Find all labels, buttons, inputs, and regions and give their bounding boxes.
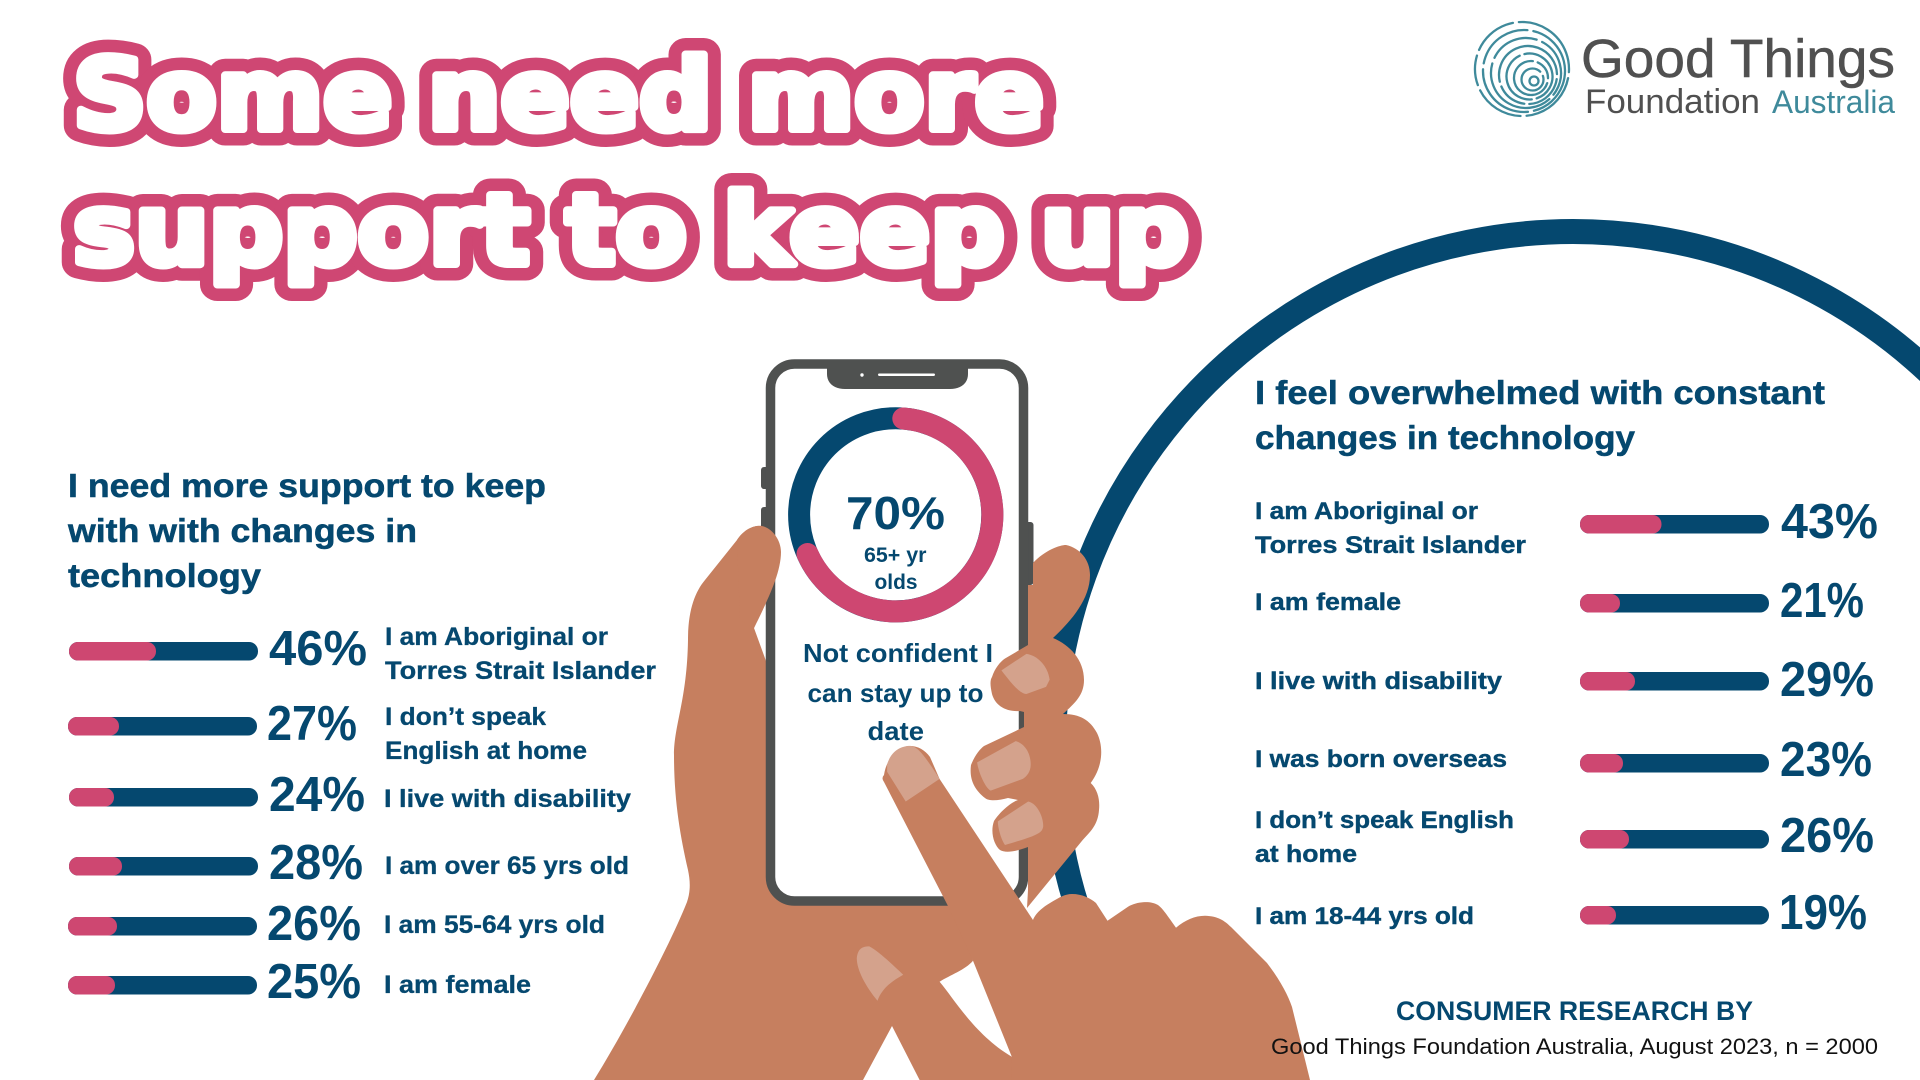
row: female 21%: 21% bbox=[1780, 574, 1864, 628]
row: 55-64 yrs old 26%: I am 55-64 yrs old bbox=[384, 911, 605, 939]
left panel heading: technology bbox=[68, 557, 262, 594]
row: female 25%: 25% bbox=[267, 955, 361, 1009]
title bbox=[73, 39, 1189, 288]
row: born overseas 23%: I was born overseas bbox=[1255, 746, 1507, 773]
title: support to keep up bbox=[73, 174, 1189, 288]
donut label bbox=[846, 487, 945, 594]
title: Some need more bbox=[73, 39, 1044, 153]
row: Aboriginal or Torres Strait Islander 43% bbox=[1255, 495, 1878, 559]
row: live with disability 29%: 29% bbox=[1780, 653, 1874, 707]
row: live with disability 29% bbox=[1255, 653, 1874, 707]
row: over 65 yrs old 28% bbox=[69, 836, 629, 890]
row: 18-44 yrs old 19% bbox=[1255, 886, 1867, 940]
navy circle arc bbox=[1053, 232, 1920, 925]
row: 55-64 yrs old 26%: 26% bbox=[267, 897, 361, 951]
row: born overseas 23% bbox=[1255, 733, 1872, 787]
row: live with disability 24%: I live with disability bbox=[384, 785, 631, 813]
row: 18-44 yrs old 19%: 19% bbox=[1779, 886, 1867, 940]
row: Aboriginal or Torres Strait Islander 46%: I am Aboriginal or bbox=[385, 623, 608, 651]
left panel heading: with with changes in bbox=[67, 512, 417, 549]
donut chart: 70% bbox=[799, 418, 992, 611]
illustration: holding fingers bbox=[971, 545, 1101, 908]
illustration: thumb over phone bbox=[737, 526, 781, 628]
research credit: CONSUMER RESEARCH BY bbox=[1396, 996, 1753, 1026]
row: over 65 yrs old 28%: I am over 65 yrs old bbox=[385, 852, 629, 880]
donut label: 70% bbox=[846, 487, 945, 539]
logo: Good Things Foundation Australia bbox=[1462, 9, 1895, 129]
row: Aboriginal or Torres Strait Islander 46%: 46% bbox=[269, 622, 367, 676]
phone screen caption: can stay up to bbox=[808, 678, 984, 708]
row: Aboriginal or Torres Strait Islander 46%: Torres Strait Islander bbox=[385, 657, 656, 685]
row: over 65 yrs old 28%: 28% bbox=[269, 836, 363, 890]
row: Aboriginal or Torres Strait Islander 43%: 43% bbox=[1781, 495, 1878, 549]
donut label: 65+ yr bbox=[864, 544, 926, 567]
right panel heading bbox=[1255, 374, 1825, 456]
left panel: support bars bbox=[68, 622, 656, 1009]
row: female 21% bbox=[1255, 574, 1864, 628]
row: female 25%: I am female bbox=[384, 971, 531, 999]
illustration: hand behind phone bbox=[594, 526, 1030, 1080]
research credit bbox=[1271, 996, 1878, 1059]
right panel: overwhelmed bars bbox=[1255, 495, 1878, 940]
row: 18-44 yrs old 19%: I am 18-44 yrs old bbox=[1255, 903, 1474, 930]
row: don't speak English at home 26%: 26% bbox=[1780, 809, 1874, 863]
title: Some need more bbox=[73, 39, 1044, 153]
row: live with disability 24% bbox=[69, 768, 631, 822]
row: born overseas 23%: 23% bbox=[1780, 733, 1872, 787]
illustration: pointing hand bbox=[882, 746, 1310, 1080]
row: Aboriginal or Torres Strait Islander 43%: Torres Strait Islander bbox=[1255, 532, 1526, 559]
logo: Good Things Foundation Australia: Foundation bbox=[1585, 83, 1760, 121]
row: don't speak English at home 27%: I don’t speak bbox=[385, 703, 546, 731]
row: don't speak English at home 27%: English at home bbox=[385, 737, 587, 765]
row: live with disability 29%: I live with disability bbox=[1255, 668, 1503, 695]
logo wordmark: Good Things bbox=[1581, 29, 1895, 89]
donut label: olds bbox=[874, 571, 918, 594]
illustration: phone bbox=[761, 364, 1034, 901]
row: don't speak English at home 26%: at home bbox=[1255, 841, 1357, 868]
illustration: fingernails bbox=[857, 654, 1050, 1001]
icon: fingerprint bbox=[1462, 9, 1582, 129]
row: don't speak English at home 26% bbox=[1255, 807, 1874, 868]
row: female 25% bbox=[68, 955, 531, 1009]
row: female 21%: I am female bbox=[1255, 589, 1401, 616]
row: don't speak English at home 27% bbox=[68, 697, 587, 765]
phone screen caption bbox=[803, 638, 993, 746]
research credit: Good Things Foundation Australia, August 2023, n = 2000 bbox=[1271, 1034, 1878, 1059]
row: 55-64 yrs old 26% bbox=[68, 897, 605, 951]
right panel heading: changes in technology bbox=[1255, 419, 1636, 456]
row: Aboriginal or Torres Strait Islander 43%: I am Aboriginal or bbox=[1255, 498, 1478, 525]
left panel heading: I need more support to keep bbox=[68, 467, 546, 504]
title: support to keep up bbox=[73, 174, 1189, 288]
phone screen caption: date bbox=[868, 716, 924, 746]
phone screen caption: Not confident I bbox=[803, 638, 993, 668]
row: live with disability 24%: 24% bbox=[269, 768, 365, 822]
row: don't speak English at home 27%: 27% bbox=[267, 697, 357, 751]
left panel heading bbox=[67, 467, 546, 594]
row: Aboriginal or Torres Strait Islander 46% bbox=[69, 622, 656, 685]
logo: Good Things Foundation Australia: Australia bbox=[1772, 84, 1895, 120]
row: don't speak English at home 26%: I don’t speak English bbox=[1255, 807, 1514, 834]
right panel heading: I feel overwhelmed with constant bbox=[1255, 374, 1825, 411]
